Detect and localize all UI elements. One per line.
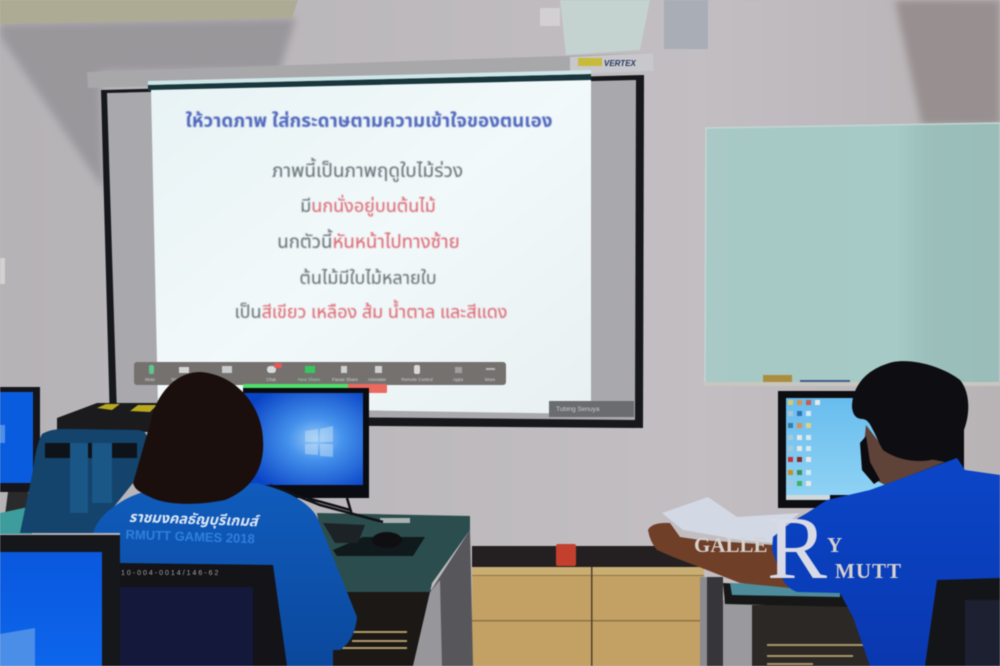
slide text: ต้นไม้มีใบไม้หลายใบ xyxy=(299,266,437,293)
center monitor xyxy=(243,388,369,498)
air conditioner xyxy=(0,0,298,24)
snack cup on floor xyxy=(556,544,576,566)
tower yellow labels xyxy=(97,404,157,412)
wooden floor xyxy=(472,567,704,666)
jacket thai text: ราชมงคลธัญบุรีเกมส์ xyxy=(128,507,261,533)
gallery watermark: MUTT xyxy=(835,559,902,583)
slide text: ภาพนี้เป็นภาพฤดูใบไม้ร่วง xyxy=(272,157,463,186)
upper left wall shadow xyxy=(0,18,296,190)
left monitor stand xyxy=(5,492,30,515)
gallery watermark: R xyxy=(767,499,827,598)
hair xyxy=(133,372,263,504)
paper held by man xyxy=(662,497,800,543)
right desk xyxy=(700,577,870,666)
zoom toolbar: New Share xyxy=(298,377,321,382)
seated man xyxy=(648,361,1000,666)
zoom toolbar xyxy=(134,362,506,385)
desktop icons xyxy=(788,400,820,486)
teal cloth left xyxy=(0,506,33,534)
mouse mat xyxy=(333,537,425,556)
zoom toolbar: Stop Video xyxy=(171,377,193,382)
left edge monitor xyxy=(0,387,40,492)
zoom toolbar: Apps xyxy=(453,377,464,382)
gallery watermark: GALLE xyxy=(694,533,768,557)
skirting board xyxy=(472,546,702,567)
whiteboard xyxy=(704,123,1000,386)
windows logo xyxy=(305,426,333,457)
sharing bar xyxy=(243,384,387,393)
slide text: เป็นสีเขียว เหลือง ส้ม น้ำตาล และสีแดง xyxy=(235,299,507,327)
whiteboard tray xyxy=(704,382,1000,386)
zoom toolbar: Annotate xyxy=(368,377,387,382)
slide title: ให้วาดภาพ ใส่กระดาษตามความเข้าใจของตนเอง xyxy=(185,108,553,136)
foreground chair: 10-004-0014/146-62 xyxy=(121,570,220,577)
right foreground chair xyxy=(925,578,1000,666)
slide text: นกตัวนี้หันหน้าไปทางซ้าย xyxy=(277,229,460,257)
seated woman xyxy=(93,372,357,666)
phone xyxy=(380,518,410,523)
jacket xyxy=(93,483,357,666)
right monitor xyxy=(778,391,964,508)
face mask xyxy=(860,436,880,484)
projected slide xyxy=(151,80,591,414)
desk cabinet front xyxy=(330,590,432,666)
top dark band xyxy=(148,74,591,91)
projector screen xyxy=(87,53,654,428)
zoom toolbar: Chat xyxy=(266,377,276,382)
head hair xyxy=(852,361,968,461)
arm xyxy=(648,523,790,588)
zoom toolbar: Mute xyxy=(145,377,155,382)
wall speaker xyxy=(664,0,708,49)
speaker name tag: Tubing Senuya xyxy=(556,406,600,413)
monitor cables xyxy=(270,485,383,522)
slide text xyxy=(235,157,507,327)
wall socket xyxy=(540,8,560,26)
blue shirt xyxy=(772,458,1000,666)
blue backpack xyxy=(20,429,147,533)
screen housing xyxy=(87,53,654,88)
desk top xyxy=(317,513,470,592)
center desk xyxy=(270,485,473,666)
projector mount xyxy=(560,0,650,55)
keyboard xyxy=(323,523,365,543)
vertex label: VERTEX xyxy=(604,59,637,68)
zoom toolbar: More xyxy=(485,377,496,382)
screen grey margin xyxy=(107,80,636,420)
taskbar xyxy=(786,495,830,500)
computer tower xyxy=(57,403,157,432)
top light strip xyxy=(148,70,591,85)
desk side panel xyxy=(413,530,473,666)
speaker name tag xyxy=(549,401,634,417)
foreground monitor xyxy=(0,535,120,666)
gallery watermark: Y xyxy=(827,533,842,557)
gallery watermark xyxy=(694,499,902,598)
jacket english text: RMUTT GAMES 2018 xyxy=(125,527,255,546)
zoom toolbar: Remote Control xyxy=(401,377,433,382)
vertex label xyxy=(578,58,637,68)
mouse xyxy=(372,532,402,548)
neck xyxy=(864,425,945,485)
screen frame xyxy=(101,75,644,428)
wall switch xyxy=(0,258,5,284)
upper right wall shadow xyxy=(895,0,1000,125)
zoom toolbar: Pause Share xyxy=(332,377,358,382)
foreground chair xyxy=(120,563,287,666)
slide text: มีนกนั่งอยู่บนต้นไม้ xyxy=(300,194,436,221)
drawer stripes xyxy=(353,631,407,633)
